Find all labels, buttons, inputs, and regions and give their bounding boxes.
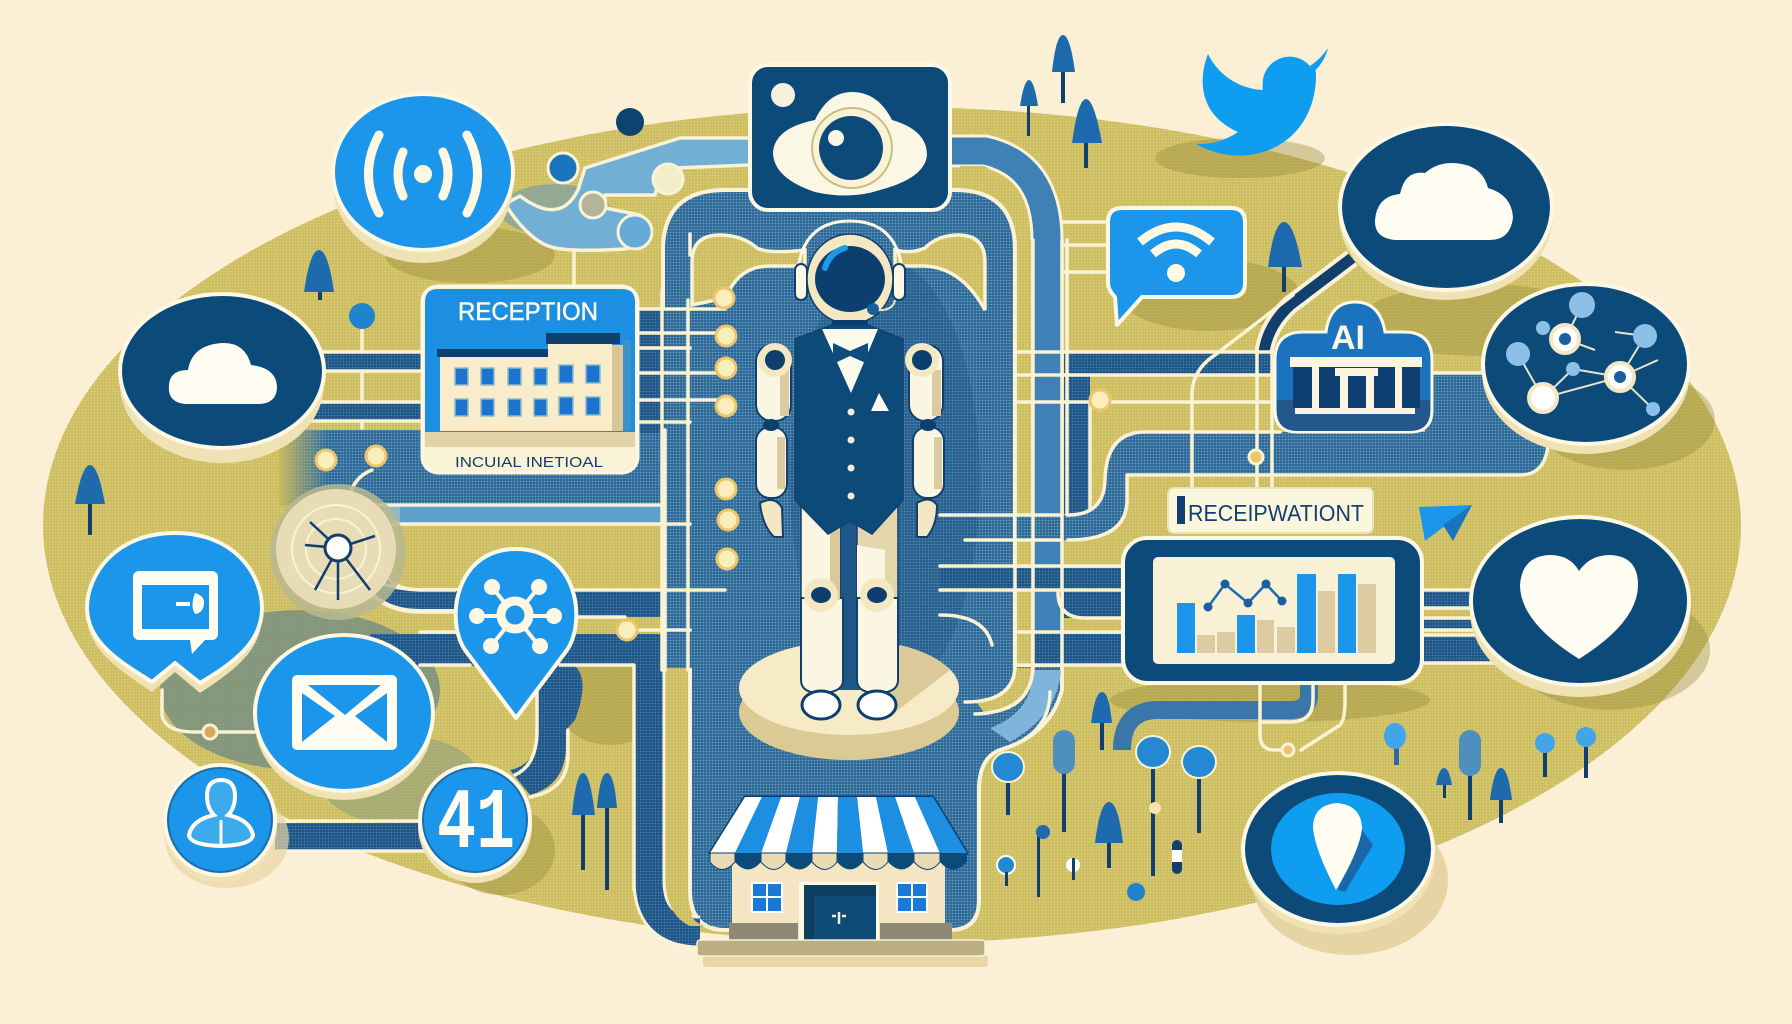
dark ball marker bbox=[616, 108, 644, 136]
icon: chat bubble bbox=[87, 533, 262, 693]
shirt collar bbox=[822, 329, 878, 393]
robot right arm bbox=[905, 343, 944, 537]
inner olive notch left bbox=[692, 235, 805, 305]
heading: reception: RECEPTION bbox=[458, 298, 598, 326]
robot receptionist bbox=[756, 221, 944, 719]
icon: location pin circle bbox=[1243, 773, 1448, 955]
left bands to cloud and reception bbox=[278, 308, 665, 524]
panel: AI building bbox=[1275, 302, 1432, 432]
tree top small bbox=[1020, 80, 1038, 136]
heading: AI: AI bbox=[1331, 319, 1365, 357]
icon: heart circle bbox=[1470, 517, 1690, 697]
robot head bbox=[807, 234, 895, 324]
connector lines bbox=[162, 222, 1500, 890]
gap between legs bbox=[838, 520, 860, 690]
robot left leg bbox=[801, 500, 843, 719]
trees bottom left bbox=[572, 773, 617, 890]
band from AI building to network circle bbox=[1425, 373, 1548, 475]
tree top bbox=[1052, 35, 1075, 103]
panel shadow behind robot bbox=[790, 260, 980, 700]
right upper tube from camera bbox=[950, 151, 1047, 665]
icon: mail circle bbox=[255, 635, 433, 800]
icon: twitter bird bbox=[1196, 48, 1328, 156]
tree far left bbox=[75, 465, 105, 535]
olive gap strips bbox=[960, 166, 1270, 714]
line chart bbox=[1204, 580, 1286, 612]
winding tube to AI building bbox=[1015, 432, 1440, 540]
vest buttons bbox=[848, 408, 854, 500]
pedestal bbox=[739, 641, 959, 760]
right upper tube fill bbox=[950, 151, 1047, 665]
light tube left of camera bbox=[505, 138, 750, 250]
icon: person circle bbox=[163, 763, 289, 888]
tree top mid bbox=[1072, 99, 1102, 168]
caption: building name: INCUIAL INETIOAL bbox=[455, 454, 603, 471]
band outline lines bbox=[1068, 373, 1548, 540]
icon: network circle bbox=[1482, 284, 1690, 454]
pin and mail bands bbox=[275, 575, 665, 850]
light tube end bottom right bbox=[990, 670, 1061, 742]
trees bbox=[75, 35, 1596, 901]
icon: wifi circle bbox=[333, 94, 513, 263]
label: receptionist: RECEIPWATIONT bbox=[1188, 500, 1364, 526]
headset bbox=[795, 221, 905, 300]
pocket square bbox=[871, 393, 889, 411]
awning bbox=[710, 797, 967, 870]
central blue panel bbox=[663, 190, 1062, 930]
tree cluster bottom bbox=[992, 692, 1596, 901]
icon: radar hub bbox=[270, 484, 406, 620]
diagonal navy tube to cloud circle bbox=[1264, 258, 1352, 352]
tree near wifi bbox=[1268, 222, 1302, 292]
tube below chart bbox=[1122, 683, 1309, 750]
icon: cloud circle top right bbox=[1339, 124, 1553, 300]
left vertical tube fill bbox=[649, 640, 700, 932]
icon: paper plane bbox=[1419, 505, 1472, 541]
bands chart to heart bbox=[1420, 590, 1490, 663]
connector nodes bbox=[203, 153, 1294, 756]
inner olive notch right bbox=[895, 235, 985, 310]
bar chart bbox=[1177, 574, 1376, 653]
panel: reception building card bbox=[422, 286, 638, 473]
building illustration bbox=[437, 333, 631, 431]
label: receptionist bbox=[1168, 488, 1373, 533]
robot vest bbox=[795, 325, 903, 534]
icon: camera eye bbox=[750, 65, 950, 210]
icon: cloud circle left bbox=[120, 294, 324, 463]
tree left bbox=[304, 250, 334, 300]
icon: number 41 circle bbox=[418, 763, 532, 883]
robot right leg bbox=[857, 500, 898, 719]
icon: network pin bbox=[456, 549, 576, 718]
icon: wifi speech bubble bbox=[1108, 208, 1245, 325]
storefront bbox=[697, 797, 988, 967]
bow tie bbox=[833, 343, 868, 364]
olive landscape ellipse bbox=[43, 107, 1741, 943]
ground shadows bbox=[160, 138, 1715, 895]
panel: chart monitor bbox=[1123, 538, 1422, 683]
right horizontal bands bbox=[940, 353, 1275, 665]
olive strip beside left tube bbox=[666, 668, 720, 926]
icon: number 41 circle: 41 bbox=[437, 775, 515, 873]
robot left arm bbox=[756, 343, 792, 537]
left vertical tube to storefront bbox=[649, 640, 700, 932]
